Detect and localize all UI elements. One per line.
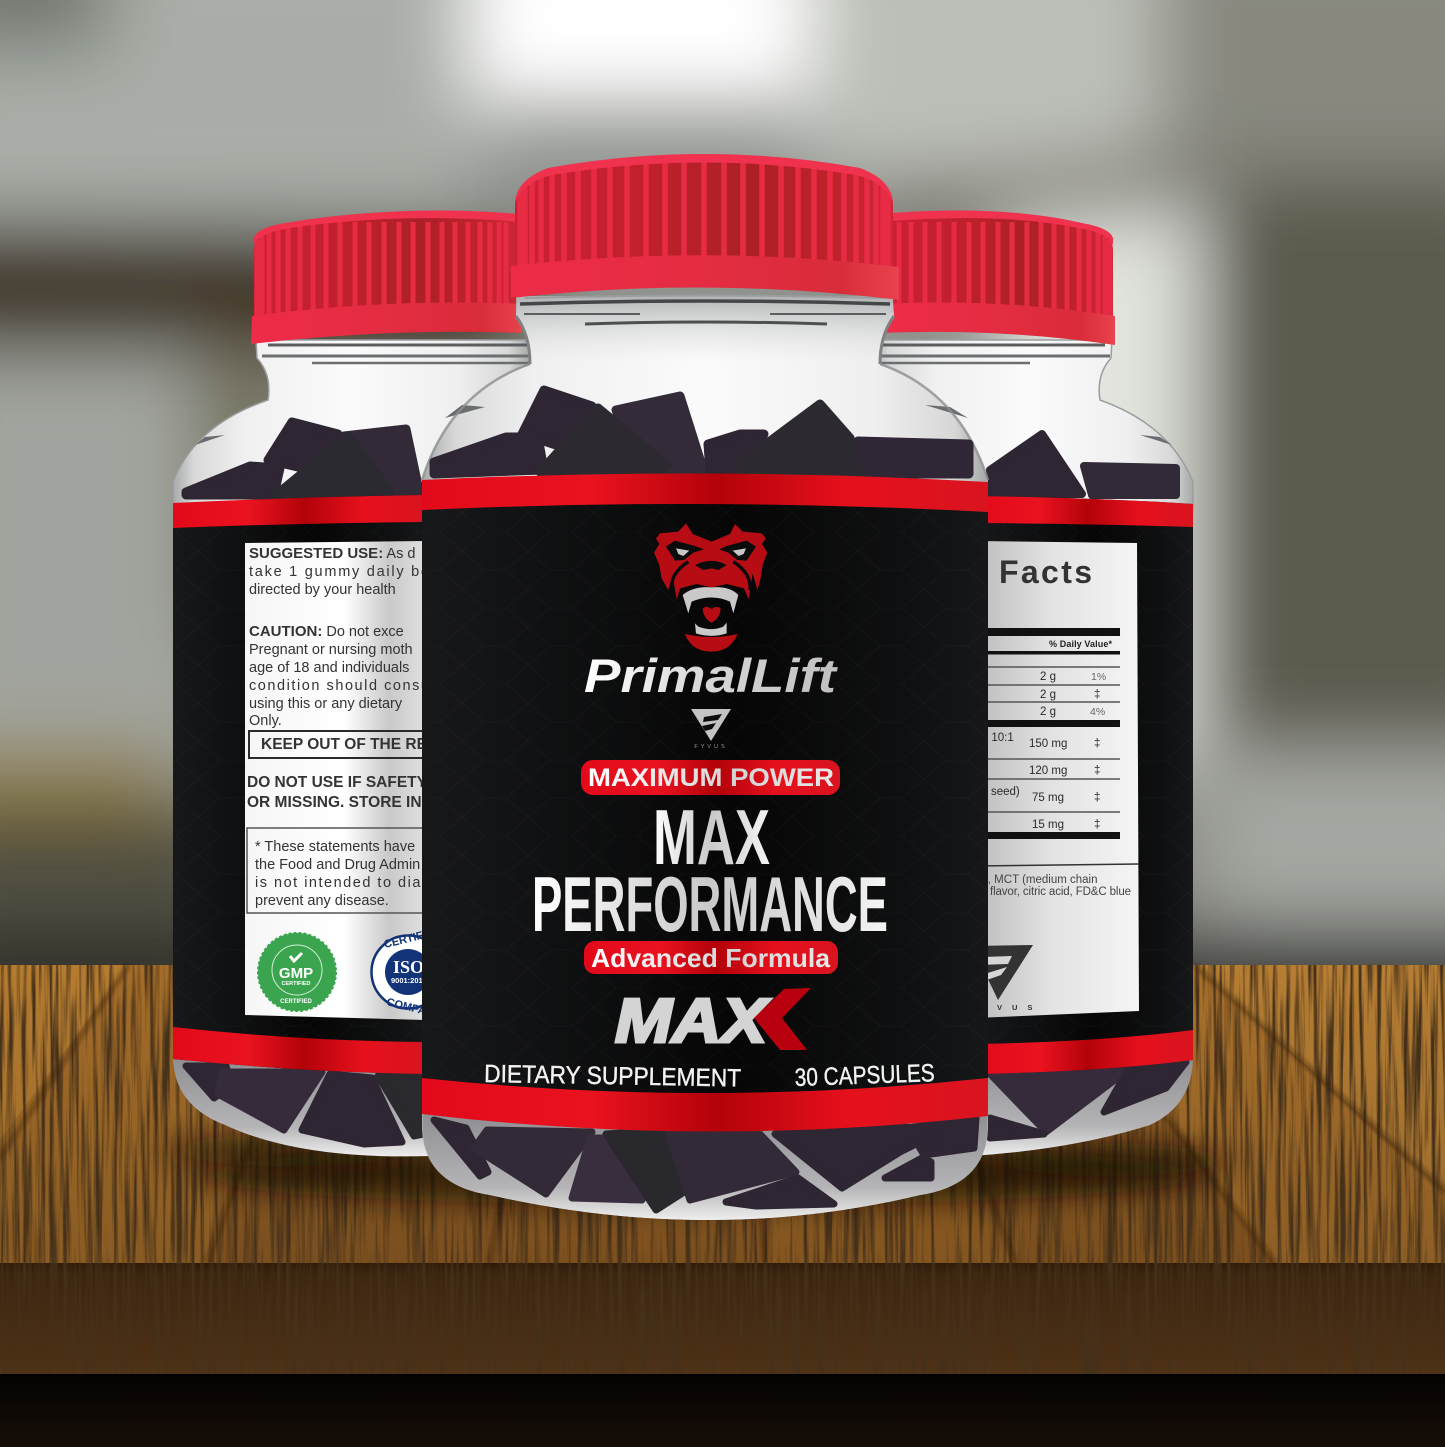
cap ribs xyxy=(520,162,888,268)
nutrition table: % Daily Value* xyxy=(1049,639,1112,649)
ISO badge: 9001:2015 xyxy=(391,976,427,985)
ingredients divider and text: flavor, citric acid, FD&C blue xyxy=(990,886,1131,898)
FDA disclaimer box: is not intended to diag xyxy=(255,875,430,891)
left bottle xyxy=(173,211,530,1156)
brand name: PrimalLift xyxy=(584,649,839,702)
nutrition table: 2 g xyxy=(1040,706,1056,718)
centre bottle gummies bottom xyxy=(434,1118,976,1210)
nutrition table: 1% xyxy=(1091,671,1106,683)
ISO badge: ISO xyxy=(393,957,424,977)
centre bottle gummies top xyxy=(434,390,969,474)
nutrition table: 150 mg xyxy=(1029,738,1067,750)
centre bottle cap xyxy=(511,154,899,300)
left bottle gummies top xyxy=(186,422,420,495)
ingredients divider and text xyxy=(975,864,1139,898)
left bottle cap xyxy=(251,211,522,344)
right bottle gummies top xyxy=(990,434,1176,495)
FYVUS logo on panel: VUS xyxy=(997,1003,1042,1012)
left bottle glass xyxy=(173,340,530,510)
left label white panel xyxy=(245,541,444,1021)
right label white panel xyxy=(972,541,1139,1018)
ingredients divider and text: up, MCT (medium chain xyxy=(975,874,1098,886)
nutrition table: ‡ xyxy=(1094,792,1100,804)
badge: advanced formula: Advanced Formula xyxy=(591,943,831,973)
suggested use text xyxy=(249,545,429,598)
headline: max performance: MAX xyxy=(653,793,770,881)
MAX logo: MAX xyxy=(615,987,771,1056)
headline: max performance: PERFORMANCE xyxy=(532,860,888,948)
caution text: Pregnant or nursing moth xyxy=(249,642,413,658)
right bottle label xyxy=(972,496,1193,1074)
facts heading: Facts xyxy=(999,554,1092,590)
nutrition table: ‡ xyxy=(1094,738,1100,750)
safety seal warning: DO NOT USE IF SAFETY xyxy=(247,774,428,791)
caution text: condition should consu xyxy=(249,678,429,694)
caution text xyxy=(249,623,429,729)
caution text: using this or any dietary xyxy=(249,696,403,712)
nutrition table: t 10:1 xyxy=(985,732,1014,744)
centre bottle label xyxy=(422,473,988,1132)
left bottle gummies bottom xyxy=(186,1066,424,1144)
safety seal warning xyxy=(247,774,428,811)
FDA disclaimer box xyxy=(247,828,430,913)
ISO badge xyxy=(372,925,444,1021)
badge: maximum power: MAXIMUM POWER xyxy=(588,764,834,792)
icon: gorilla logo xyxy=(654,523,767,652)
headline: max performance xyxy=(532,793,888,948)
keep out of reach box: KEEP OUT OF THE RE xyxy=(261,736,427,753)
GMP badge: CERTIFIED xyxy=(280,999,312,1005)
ISO badge: COMPANY xyxy=(385,996,443,1021)
nutrition table: 4% xyxy=(1090,706,1105,718)
FDA disclaimer box: * These statements have xyxy=(255,839,415,855)
GMP badge: GMP xyxy=(279,965,313,982)
left bottle label xyxy=(173,495,444,1074)
capsule count: 30 CAPSULES xyxy=(794,1059,935,1092)
suggested use text: SUGGESTED USE: As d xyxy=(249,545,415,562)
nutrition table xyxy=(975,628,1120,839)
badge: maximum power xyxy=(581,760,840,795)
right bottle bottom glass xyxy=(970,1056,1193,1156)
caution text: Only. xyxy=(249,713,282,729)
GMP badge xyxy=(258,933,336,1011)
nutrition table: 2 g xyxy=(1040,689,1056,701)
right bottle glass xyxy=(870,340,1193,510)
nutrition table: 15 mg xyxy=(1032,819,1064,831)
safety seal warning: OR MISSING. STORE IN xyxy=(247,794,422,811)
bottom red band xyxy=(422,1078,988,1132)
FYVUS logo on panel xyxy=(972,945,1042,1012)
nutrition table: ‡ xyxy=(1094,765,1100,777)
centre bottle bottom glass xyxy=(423,1110,987,1220)
centre bottle glass xyxy=(422,296,988,1220)
icon: FYVUS logo xyxy=(691,709,731,750)
nutrition table: 2 g xyxy=(1040,671,1056,683)
left bottle bottom glass xyxy=(173,1056,430,1156)
right bottle cap xyxy=(880,211,1115,345)
nutrition table: ‡ xyxy=(1094,689,1100,701)
GMP badge: CERTIFIED xyxy=(281,981,311,987)
caution text: CAUTION: Do not exce xyxy=(249,623,404,640)
suggested use text: take 1 gummy daily be xyxy=(249,564,429,580)
supplement type: DIETARY SUPPLEMENT xyxy=(484,1060,741,1092)
cap band xyxy=(511,255,899,300)
FDA disclaimer box: the Food and Drug Admin xyxy=(255,857,420,873)
nutrition table: 120 mg xyxy=(1029,765,1067,777)
blurred room background xyxy=(0,0,1445,1015)
ISO badge: CERTIFIED xyxy=(383,925,442,951)
centre bottle xyxy=(422,154,988,1220)
caution text: age of 18 and individuals xyxy=(249,660,409,676)
cap top rim xyxy=(515,154,893,203)
keep out of reach box xyxy=(249,731,429,758)
nutrition table: seed) xyxy=(991,786,1020,798)
nutrition table: ‡ xyxy=(1094,819,1100,831)
suggested use text: directed by your health xyxy=(249,582,396,598)
nutrition table: 75 mg xyxy=(1032,792,1064,804)
icon: FYVUS logo: FYVUS xyxy=(694,744,728,750)
top red band xyxy=(422,473,988,512)
right bottle gummies bottom xyxy=(990,1062,1186,1138)
right bottle xyxy=(870,211,1193,1156)
FDA disclaimer box: prevent any disease. xyxy=(255,893,389,909)
wooden table xyxy=(0,965,1445,1447)
